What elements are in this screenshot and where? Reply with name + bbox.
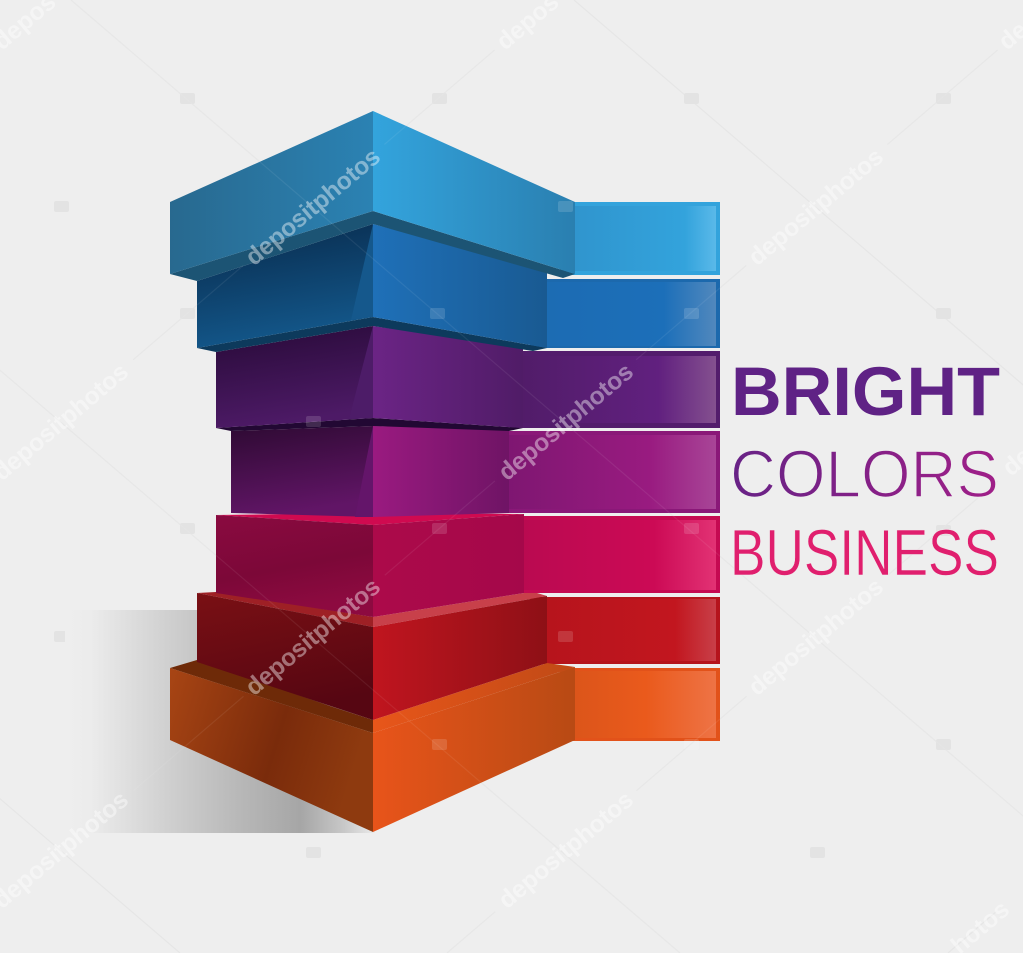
- watermarks: depositphotos: [744, 143, 889, 271]
- heading: COLORS: COLORS: [730, 437, 999, 512]
- tier 3: violet: [216, 326, 523, 431]
- horizontal colour bars: [495, 202, 720, 741]
- tier 1: light blue: [170, 111, 575, 281]
- title text: [730, 353, 1000, 589]
- watermarks: depositphotos: [241, 573, 386, 701]
- bar 2: blue: [530, 279, 720, 348]
- tier 2: blue: [197, 224, 547, 352]
- drop shadow: [65, 610, 375, 833]
- watermarks: depositphotos: [744, 573, 889, 701]
- tier 5: crimson: [216, 513, 524, 617]
- bar 3: violet: [510, 351, 720, 428]
- bar 5: crimson: [510, 516, 720, 593]
- watermarks: depositphotos: [494, 786, 639, 914]
- bar 7: orange: [560, 668, 720, 741]
- heading: BRIGHT: BRIGHT: [731, 353, 1000, 430]
- bar 6: red: [530, 597, 720, 664]
- watermark camera icons on background: [54, 93, 951, 858]
- tier 7: orange: [170, 660, 575, 832]
- tier 6: red: [197, 592, 547, 720]
- tier 4: magenta: [231, 426, 509, 517]
- watermarks: depositphotos: [241, 143, 386, 271]
- watermarks: depositphotos: [494, 358, 639, 486]
- 3D stacked tower: [170, 111, 575, 832]
- bar 1: light blue: [560, 202, 720, 275]
- bar 4: magenta: [495, 431, 720, 513]
